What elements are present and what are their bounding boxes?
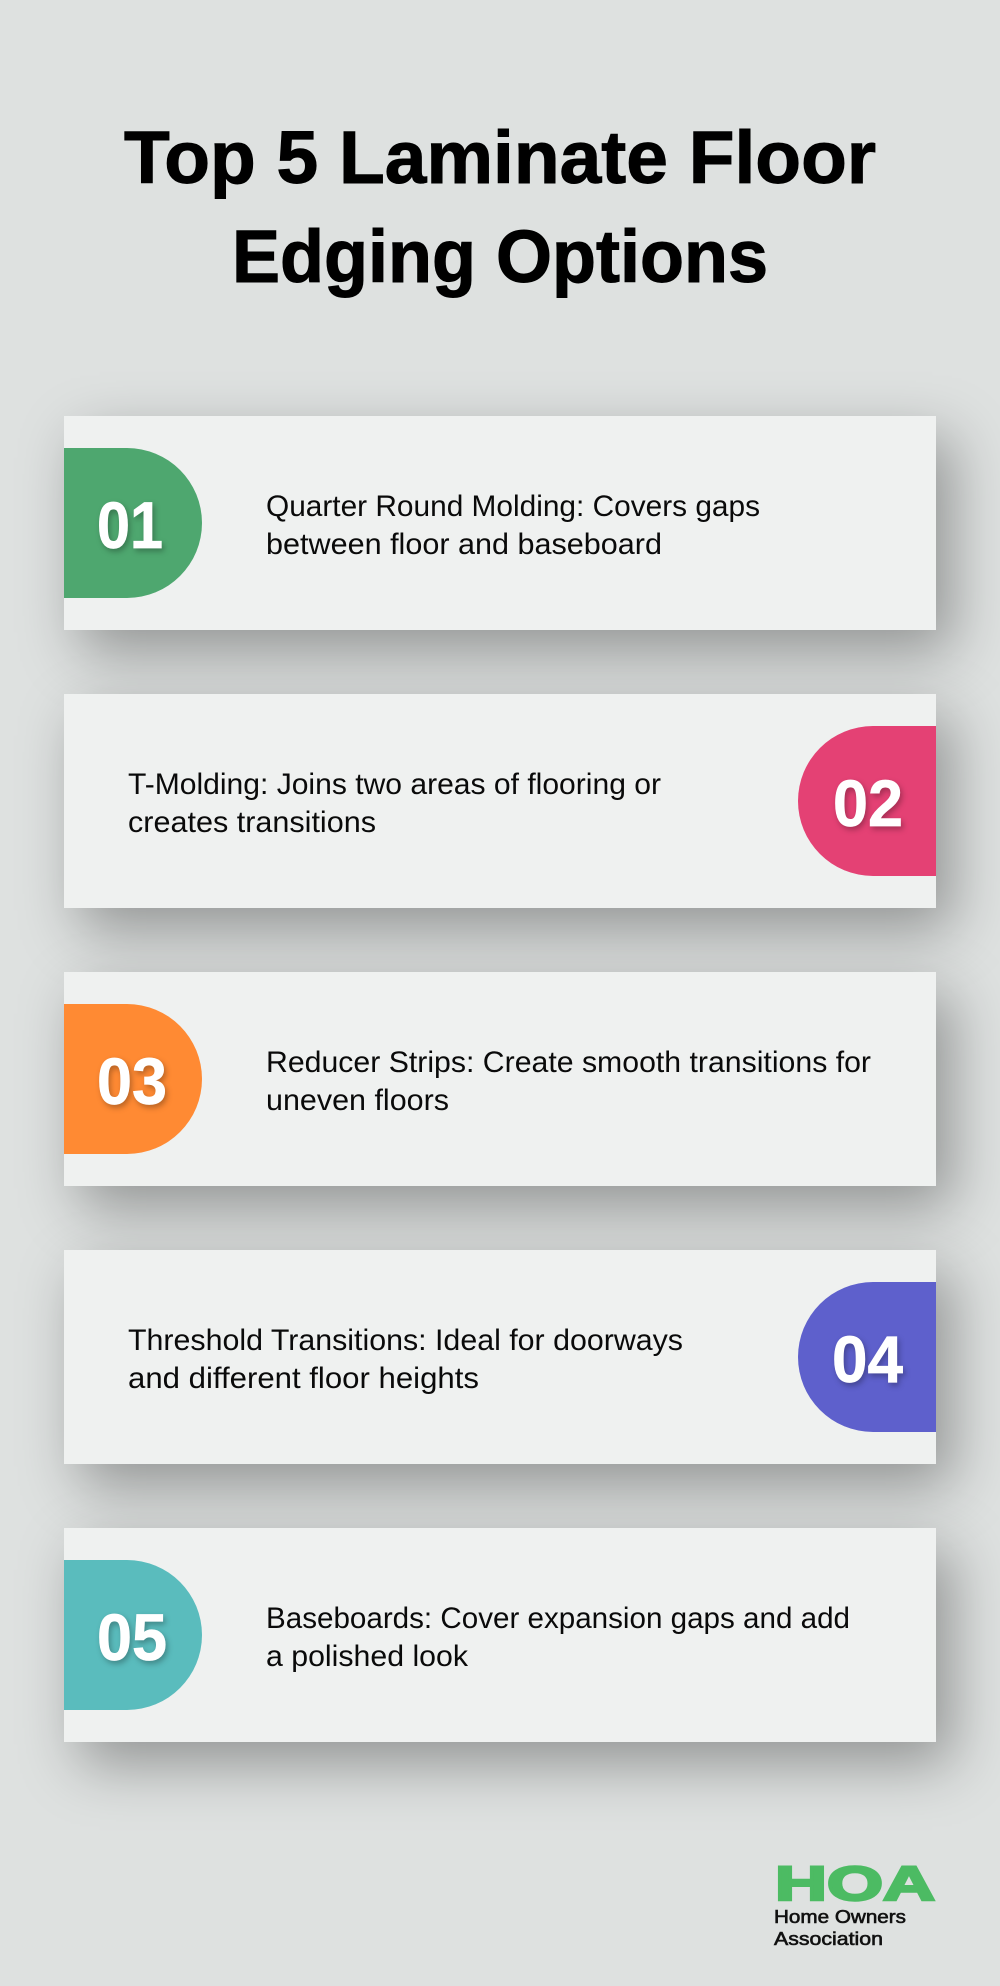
logo: HOA Home Owners Association: HOA — [775, 1858, 935, 1911]
panel: item 04 — [64, 1250, 936, 1464]
number badge 02 — [798, 726, 936, 876]
text and number 04: and different floor heights — [128, 1362, 479, 1395]
text and number 02 — [128, 766, 906, 840]
text and number 01: Quarter Round Molding: Covers gaps — [266, 490, 760, 523]
number badge 03 — [64, 1004, 202, 1154]
panel: item 03 — [64, 972, 936, 1186]
text and number 04: Threshold Transitions: Ideal for doorways — [128, 1324, 683, 1357]
text and number 04 — [128, 1322, 908, 1396]
text and number 05: a polished look — [266, 1640, 468, 1673]
text and number 05: 05 — [97, 1600, 167, 1674]
text and number 01 — [97, 488, 760, 562]
panel: item 02 — [64, 694, 936, 908]
text and number 01: between floor and baseboard — [266, 528, 662, 561]
text and number 03: Reducer Strips: Create smooth transitions for — [266, 1046, 871, 1079]
text and number 02: creates transitions — [128, 806, 376, 839]
panel: item 01 — [64, 416, 936, 630]
text and number 03: 03 — [97, 1044, 167, 1118]
number badge 01 — [64, 448, 202, 598]
text and number 05: Baseboards: Cover expansion gaps and add — [266, 1602, 850, 1635]
title — [124, 116, 876, 298]
panel: item 05 — [64, 1528, 936, 1742]
text and number 01: 01 — [97, 488, 163, 562]
number badge 04 — [798, 1282, 936, 1432]
title: Top 5 Laminate Floor — [124, 116, 876, 199]
text and number 05 — [97, 1600, 850, 1674]
text and number 03: uneven floors — [266, 1084, 449, 1117]
number badge 05 — [64, 1560, 202, 1710]
text and number 02: 02 — [833, 766, 903, 840]
logo: HOA Home Owners Association: Home Owners — [774, 1907, 906, 1927]
title: Edging Options — [232, 215, 768, 298]
logo: HOA Home Owners Association: Association — [774, 1929, 883, 1949]
text and number 04: 04 — [832, 1322, 903, 1396]
text and number 02: T-Molding: Joins two areas of flooring or — [128, 768, 661, 801]
text and number 03 — [97, 1044, 871, 1118]
